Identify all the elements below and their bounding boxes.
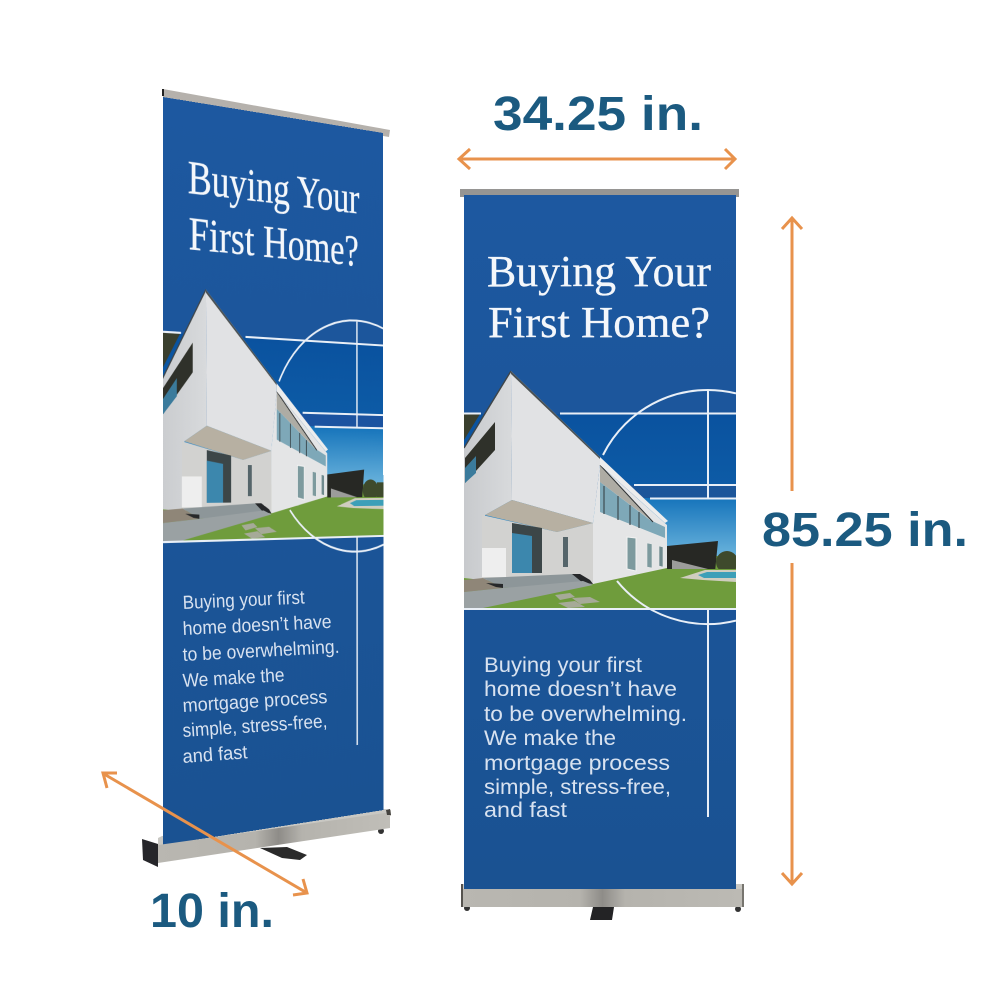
banner body text <box>484 654 687 822</box>
left banner body text: mortgage process <box>182 687 328 717</box>
left stand base <box>142 809 391 867</box>
panel: left banner in perspective <box>163 97 384 844</box>
blueprint lines and circle <box>464 390 736 817</box>
banner heading <box>188 151 359 275</box>
width label: 34.25 in. <box>493 88 703 141</box>
left banner body text: home doesn’t have <box>182 612 332 640</box>
left banner body text: to be overwhelming. <box>182 637 340 666</box>
banner background <box>464 195 736 890</box>
photo of modern house with blueprint lines <box>155 285 394 541</box>
photo of modern house with blueprint lines <box>464 371 738 608</box>
left banner body text: and fast <box>182 742 249 768</box>
banner heading: Buying Your <box>487 247 711 296</box>
banner heading <box>487 247 711 347</box>
height dimension arrow <box>782 218 802 884</box>
banner body text: to be overwhelming. <box>484 703 687 726</box>
left banner body text: We make the <box>182 665 285 692</box>
banner body text: home doesn’t have <box>484 678 677 701</box>
banner heading: First Home? <box>488 298 710 347</box>
panel: right banner front view <box>464 195 736 889</box>
banner body text: simple, stress-free, <box>484 776 671 799</box>
width dimension arrow <box>459 149 735 169</box>
banner background <box>163 97 383 845</box>
left banner body text: Buying your first <box>182 587 306 614</box>
banner body text: and fast <box>484 799 567 822</box>
left stand top rail <box>162 89 390 137</box>
right stand base <box>461 884 744 920</box>
right stand base tabs <box>462 884 743 890</box>
banner body text: We make the <box>484 727 616 750</box>
depth label: 10 in. <box>150 885 274 938</box>
depth dimension arrow <box>103 773 307 895</box>
banner heading: First Home? <box>191 210 383 301</box>
banner body text: Buying your first <box>484 654 642 677</box>
left banner body text: simple, stress-free, <box>182 711 328 742</box>
banner heading: Buying Your <box>190 153 383 244</box>
left stand base back lip <box>158 809 391 848</box>
right stand top rail <box>460 189 739 197</box>
banner body text: mortgage process <box>484 752 670 775</box>
height label: 85.25 in. <box>762 504 968 557</box>
blueprint lines and circle <box>155 306 394 771</box>
